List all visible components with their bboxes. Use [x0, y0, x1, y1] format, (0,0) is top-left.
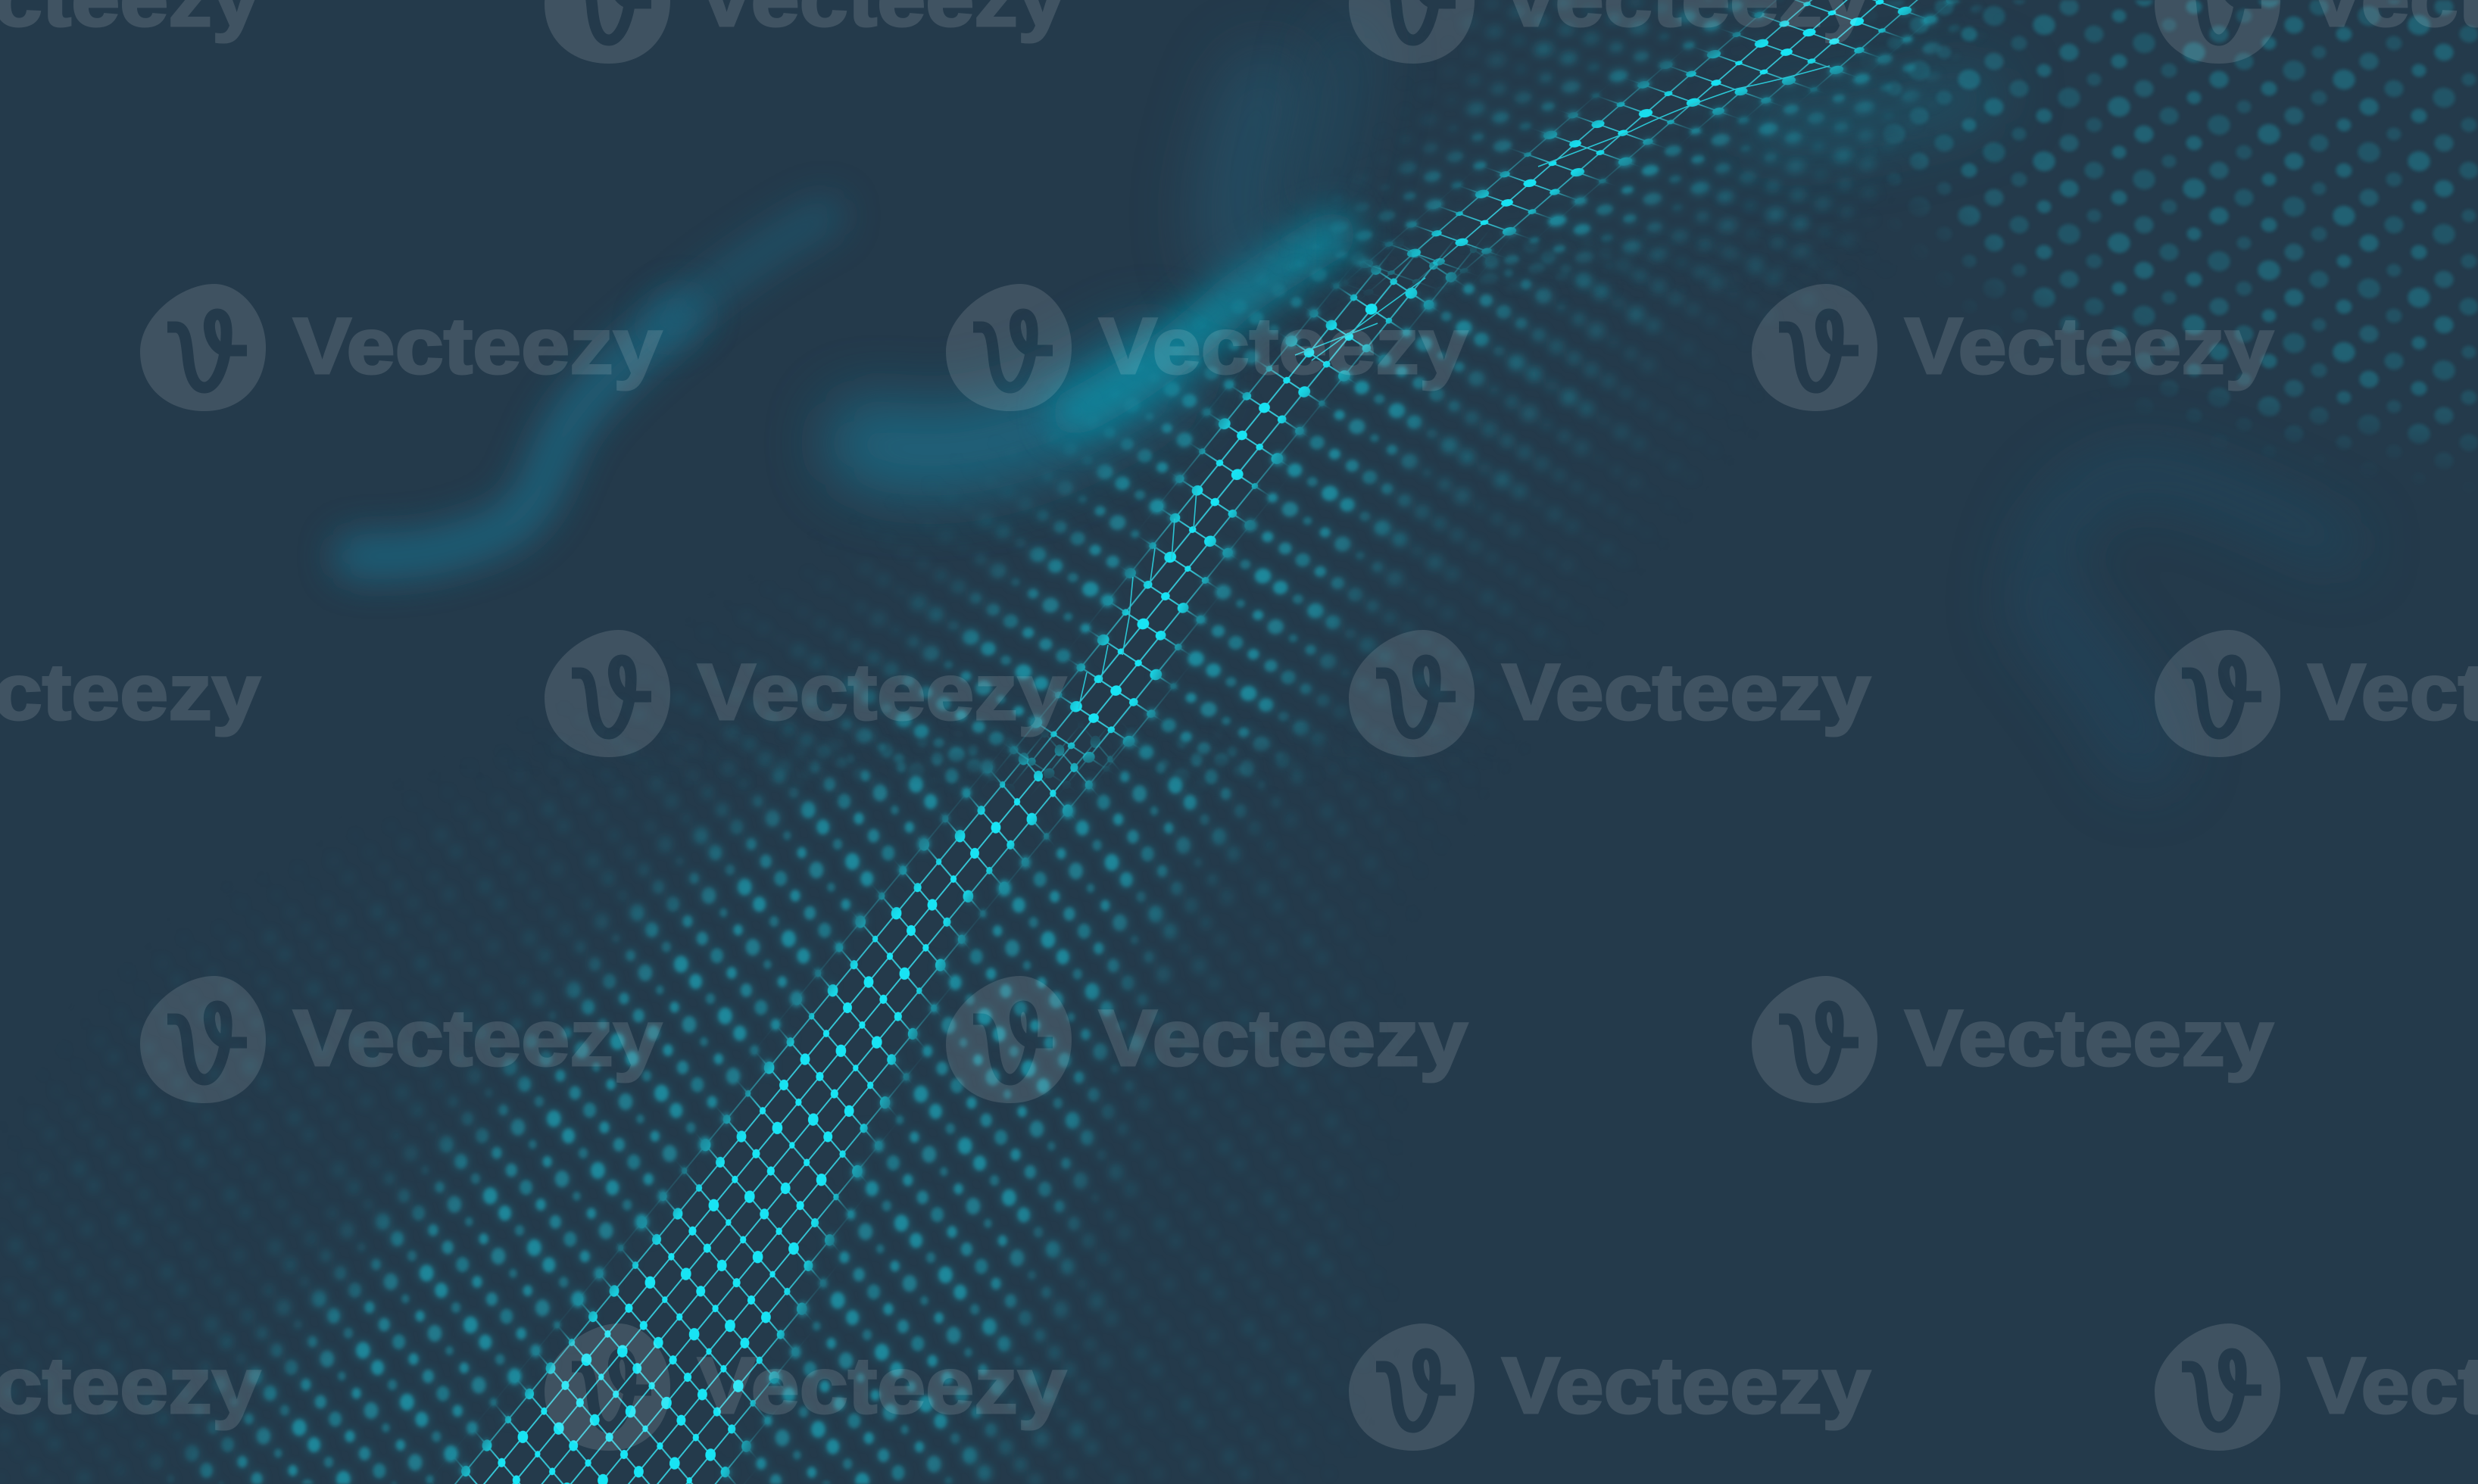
watermark: row 3: Vecteezy	[1905, 994, 2274, 1083]
mesh accent lines	[1078, 66, 1830, 709]
watermark: row 4: Vecteezy	[1502, 1342, 1871, 1430]
watermark: row 1: Vecteezy	[1099, 302, 1468, 391]
watermark: row 4	[0, 1323, 2478, 1451]
watermark: row 2: Vecteezy	[1502, 648, 1871, 737]
dim blurred patches, upper right	[1770, 95, 2339, 750]
watermark: row 2: Vecteezy	[698, 648, 1066, 737]
watermark: row 3	[140, 976, 2274, 1103]
blurred teal ribbon: left S-curve	[356, 216, 825, 556]
watermark: row 3: Vecteezy	[1099, 994, 1468, 1083]
watermark: row 0	[0, 0, 2478, 64]
watermark: row 1: Vecteezy	[1905, 302, 2274, 391]
dot lattice: lower band	[11, 731, 1344, 1484]
watermark: row 2	[0, 630, 2478, 757]
blurred teal ribbon: central glow	[871, 45, 1348, 451]
watermark: row 3: Vecteezy	[293, 994, 662, 1083]
watermark: row 4: Vecteezy	[698, 1342, 1066, 1430]
watermark: row 1	[140, 284, 2274, 411]
watermark: row 1: Vecteezy	[293, 302, 662, 391]
